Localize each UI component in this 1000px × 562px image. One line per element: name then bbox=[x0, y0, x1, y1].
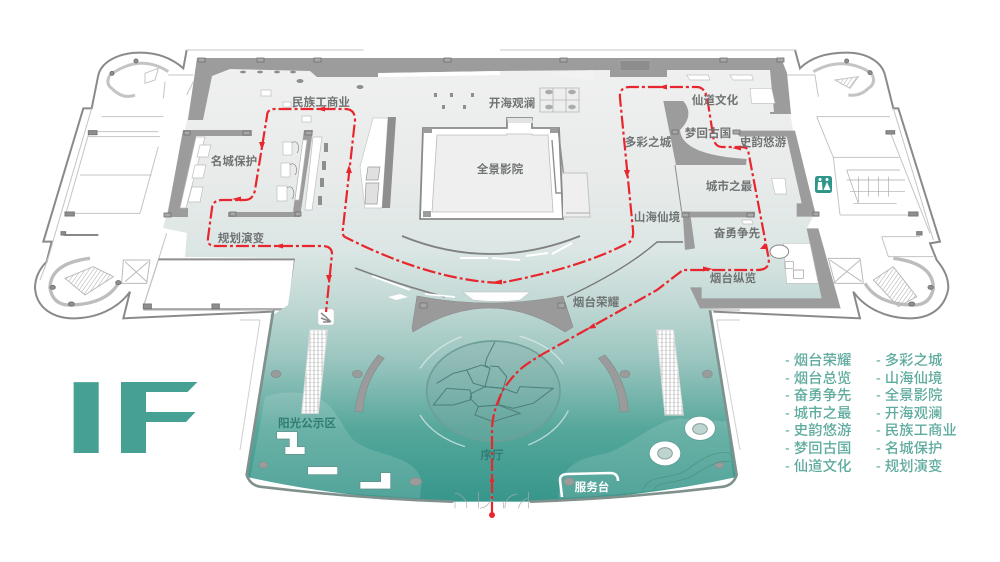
right wing bbox=[500, 50, 948, 318]
arcs and gate bbox=[355, 236, 683, 332]
legend: - 名城保护 bbox=[876, 440, 942, 457]
zone labels: 梦回古国 bbox=[685, 126, 731, 140]
zone labels: 全景影院 bbox=[477, 162, 524, 176]
legend: - 规划演变 bbox=[876, 457, 942, 475]
panel: floor bbox=[163, 58, 840, 502]
start point bbox=[489, 512, 495, 518]
zone labels bbox=[211, 93, 787, 494]
legend: - 梦回古国 bbox=[785, 440, 851, 457]
columns bbox=[164, 58, 819, 217]
legend: - 开海观澜 bbox=[876, 405, 942, 422]
floor title: 1F bbox=[62, 360, 206, 475]
zone labels: 民族工商业 bbox=[292, 95, 350, 109]
zone labels: 开海观澜 bbox=[489, 96, 535, 110]
zone labels: 山海仙境 bbox=[634, 210, 681, 224]
zone labels: 名城保护 bbox=[211, 154, 257, 168]
legend bbox=[785, 351, 957, 475]
zone labels: 服务台 bbox=[575, 480, 609, 494]
legend: - 民族工商业 bbox=[876, 422, 957, 439]
panel: cinema bbox=[420, 118, 590, 219]
entrance doors bbox=[453, 492, 530, 509]
legend: - 山海仙境 bbox=[876, 369, 942, 387]
legend: - 烟台荣耀 bbox=[785, 351, 851, 369]
zone labels: 奋勇争先 bbox=[714, 226, 761, 240]
zone labels: 烟台荣耀 bbox=[573, 295, 620, 309]
zone labels: 城市之最 bbox=[706, 179, 753, 193]
zone labels: 多彩之城 bbox=[625, 135, 672, 149]
icon: escalator sign bbox=[318, 309, 334, 325]
legend: - 烟台总览 bbox=[785, 369, 851, 387]
map circle bbox=[420, 336, 568, 447]
benches and columns bbox=[259, 355, 724, 486]
route arrows bbox=[232, 84, 768, 482]
zone labels: 烟台纵览 bbox=[710, 271, 757, 285]
legend: - 奋勇争先 bbox=[785, 387, 851, 404]
legend: - 多彩之城 bbox=[876, 351, 943, 369]
left wing bbox=[35, 50, 363, 318]
floor title: 1F: F bbox=[111, 360, 203, 475]
legend: - 城市之最 bbox=[785, 404, 851, 422]
legend: - 仙道文化 bbox=[785, 457, 851, 475]
tetris seats bbox=[277, 432, 391, 489]
floor title: 1F: I bbox=[62, 361, 110, 475]
zone labels: 规划演变 bbox=[218, 231, 265, 245]
zone labels: 序厅 bbox=[480, 448, 504, 462]
displays: east halls bbox=[620, 61, 818, 283]
displays: heritage hall bbox=[180, 90, 322, 210]
zone labels: 阳光公示区 bbox=[278, 416, 336, 430]
zone labels: 史韵悠游 bbox=[740, 135, 787, 149]
small exhibits bbox=[240, 71, 474, 205]
exhibit wall: centre bbox=[360, 117, 396, 208]
legend: - 全景影院 bbox=[876, 386, 942, 404]
lobby zones bbox=[250, 392, 733, 498]
escalators bbox=[302, 330, 683, 415]
legend: - 史韵悠游 bbox=[785, 421, 851, 439]
exhibit: sea view bbox=[540, 88, 579, 112]
zone labels: 仙道文化 bbox=[692, 93, 739, 107]
service desk bbox=[560, 473, 618, 497]
icon: restroom bbox=[815, 176, 832, 193]
rings bbox=[643, 416, 730, 490]
lobby outline bbox=[240, 310, 740, 502]
route bbox=[208, 84, 769, 518]
walls bbox=[167, 58, 841, 308]
